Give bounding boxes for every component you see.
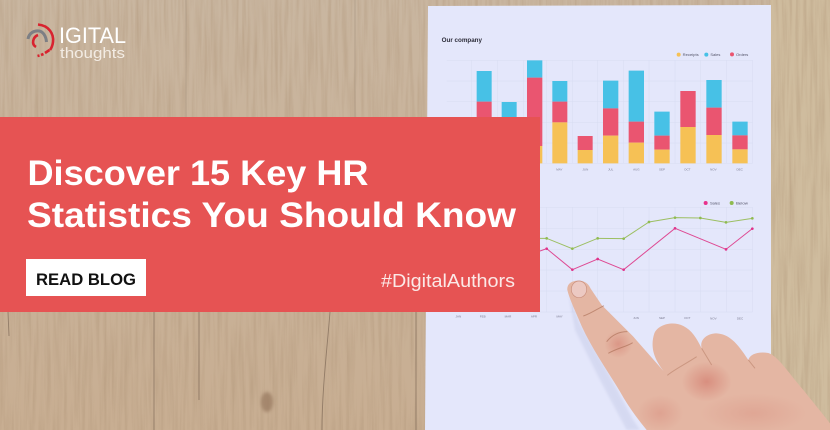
red panel — [0, 117, 540, 312]
month labels: NOV — [710, 317, 717, 321]
legend: lines: Below — [736, 200, 748, 205]
axis labels: DEC — [737, 167, 744, 171]
month labels: APR — [531, 314, 538, 318]
legend: lines — [704, 200, 748, 205]
month labels — [456, 314, 744, 321]
legend: lines: Sales — [710, 200, 720, 205]
axis labels: AUG — [633, 167, 640, 171]
logo wordmark: thoughts — [60, 46, 125, 62]
axis labels: JUL — [608, 167, 614, 171]
month labels: MAY — [557, 315, 563, 319]
logo mark — [28, 24, 53, 56]
legend: bars: Sales — [710, 52, 720, 57]
axis labels: JUN — [582, 167, 588, 171]
month labels: FEB — [480, 314, 486, 318]
legend: bars — [677, 52, 748, 57]
paper sheet — [425, 5, 771, 430]
logo wordmark: IGITAL — [59, 23, 126, 48]
month labels: MAR — [505, 314, 512, 318]
headline: Statistics You Should Know — [27, 196, 517, 235]
line chart — [456, 200, 754, 321]
pink series — [540, 227, 754, 271]
logo — [28, 23, 126, 62]
axis labels: MAY — [556, 167, 562, 171]
legend: bars: Receipts — [683, 52, 699, 57]
month labels: SEP — [659, 316, 665, 320]
month labels: OCT — [684, 316, 691, 320]
month labels: DEC — [737, 317, 744, 321]
green series — [540, 216, 754, 250]
fingernail — [571, 281, 587, 298]
axis labels: NOV — [710, 167, 717, 171]
axis labels: SEP — [659, 167, 665, 171]
headline: Discover 15 Key HR — [28, 154, 368, 193]
headline — [27, 154, 517, 235]
hashtag: #DigitalAuthors — [381, 270, 515, 291]
bar series — [477, 60, 748, 163]
read blog button — [26, 259, 146, 296]
axis labels: OCT — [684, 167, 691, 171]
chart title: Our company — [442, 38, 483, 44]
month labels: JAN — [456, 314, 461, 318]
hand pointing — [567, 281, 830, 430]
legend: bars: Orders — [736, 52, 748, 57]
bar chart — [442, 38, 753, 171]
axis labels — [556, 167, 744, 171]
logo wordmark — [59, 23, 126, 62]
read blog button: READ BLOG — [36, 270, 136, 289]
month labels: JUN — [633, 316, 639, 320]
